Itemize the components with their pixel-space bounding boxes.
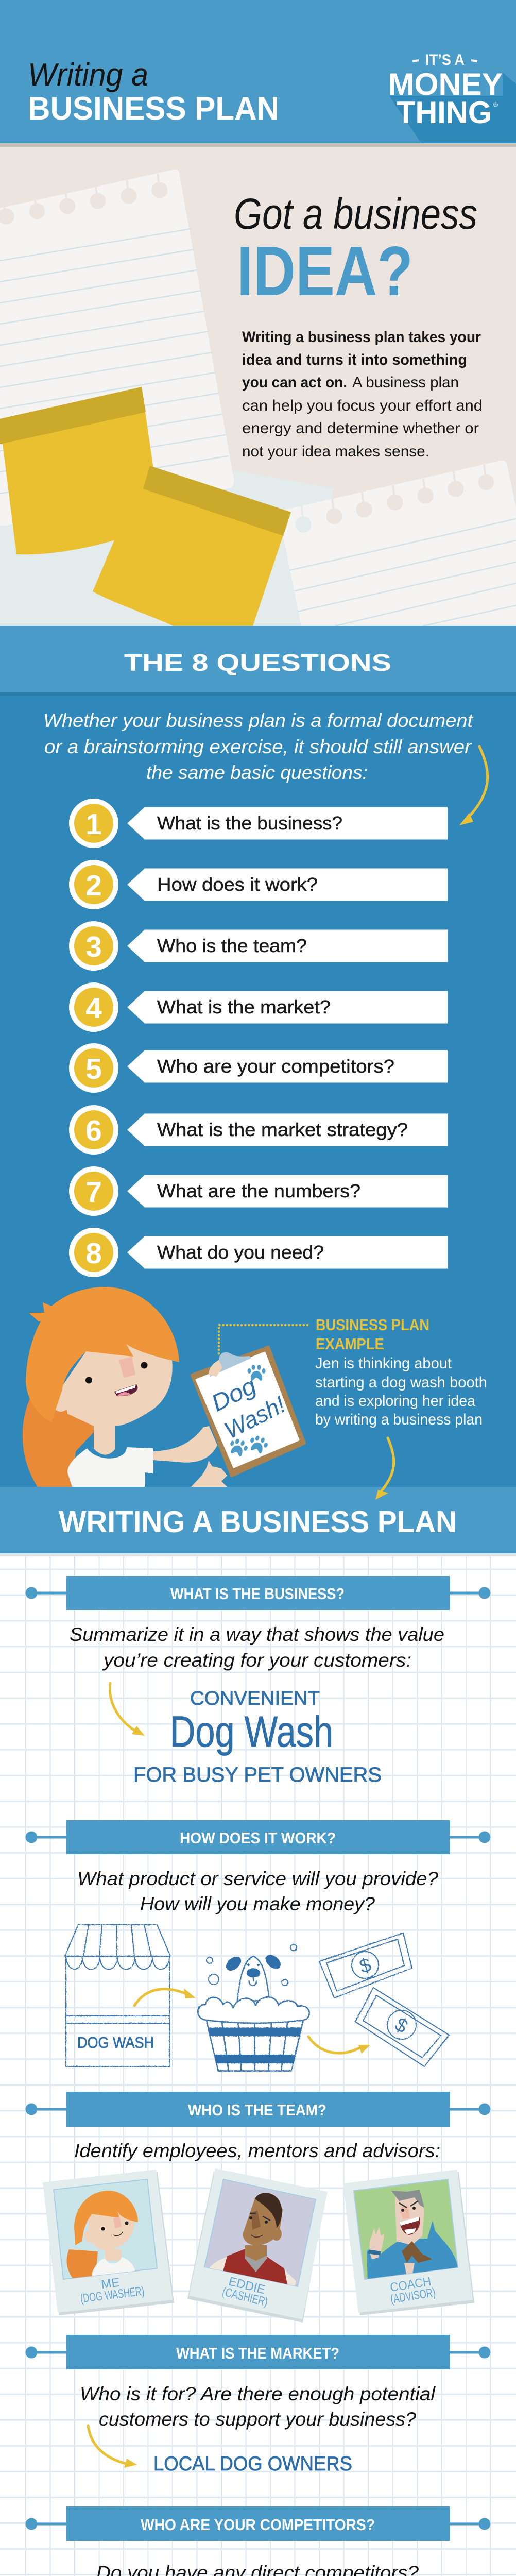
text block: questions intro: or a brainstorming exercise, it should still answer bbox=[44, 736, 472, 757]
question text: Identify employees, mentors and advisors: bbox=[74, 2140, 440, 2161]
panel: writing a business plan band bbox=[0, 1487, 516, 1556]
question 7: 7 bbox=[85, 1176, 102, 1209]
clipboard bbox=[192, 1347, 304, 1476]
panel: the 8 questions bbox=[0, 626, 516, 1487]
handwritten answer: Dog Wash bbox=[170, 1707, 333, 1756]
text block: intro paragraph: A business plan bbox=[352, 374, 459, 391]
question 2: How does it work? bbox=[157, 874, 318, 895]
section header bbox=[26, 1820, 490, 1854]
question 8: What do you need? bbox=[157, 1242, 324, 1263]
text block: intro paragraph: energy and determine whether or bbox=[242, 420, 479, 437]
question text: customers to support your business? bbox=[99, 2409, 416, 2430]
icon: dog in tub bbox=[198, 1944, 309, 2071]
arrow bbox=[88, 2426, 137, 2468]
section header bbox=[26, 2506, 490, 2541]
question text: How will you make money? bbox=[140, 1893, 375, 1914]
panel: got a business idea bbox=[0, 147, 516, 626]
photo card: me: ME bbox=[100, 2276, 121, 2292]
text block: intro paragraph: Writing a business plan takes your bbox=[242, 329, 481, 346]
arrow bbox=[308, 2037, 370, 2054]
logo: it's a money thing: THING bbox=[397, 95, 492, 130]
photo card: me: (DOG WASHER) bbox=[79, 2284, 145, 2306]
logo: it's a money thing: ® bbox=[493, 101, 498, 108]
section header bbox=[26, 2092, 490, 2127]
heading: writing a business plan: WRITING A BUSINESS PLAN bbox=[59, 1505, 457, 1539]
photo card: eddie: EDDIE bbox=[227, 2275, 267, 2297]
section header: WHO ARE YOUR COMPETITORS? bbox=[141, 2516, 375, 2534]
question 2 bbox=[69, 860, 448, 909]
clipboard: Wash! bbox=[220, 1391, 289, 1444]
handwritten answer: CONVENIENT bbox=[190, 1688, 320, 1709]
callout: business plan example: starting a dog wash booth bbox=[315, 1374, 487, 1391]
heading: writing a business plan bbox=[28, 57, 279, 127]
heading: the 8 questions: THE 8 QUESTIONS bbox=[124, 649, 391, 676]
question text bbox=[70, 1624, 444, 1671]
text block: questions intro bbox=[43, 710, 474, 783]
arrow bbox=[110, 1683, 145, 1736]
section header bbox=[26, 2335, 490, 2369]
photo card: me bbox=[43, 2170, 174, 2315]
callout: business plan example: EXAMPLE bbox=[316, 1335, 384, 1353]
question 7: What are the numbers? bbox=[157, 1180, 360, 1201]
section: what is the business bbox=[26, 1576, 490, 1786]
callout: business plan example: Jen is thinking about bbox=[315, 1355, 452, 1372]
question text bbox=[80, 2383, 436, 2430]
question text: you’re creating for your customers: bbox=[102, 1650, 411, 1671]
icon: dollar bills: $ bbox=[391, 2013, 411, 2038]
question 8 bbox=[69, 1228, 448, 1277]
callout: business plan example: BUSINESS PLAN bbox=[316, 1316, 429, 1334]
logo: it's a money thing: IT’S A bbox=[425, 52, 465, 69]
sticky note: right bbox=[93, 466, 291, 626]
icon: dollar bills: $ bbox=[357, 1954, 374, 1978]
question 3: 3 bbox=[85, 930, 102, 963]
question 5 bbox=[69, 1043, 448, 1093]
question text: Who is it for? Are there enough potential bbox=[80, 2383, 436, 2404]
question 4 bbox=[69, 982, 448, 1032]
photo card: eddie bbox=[187, 2168, 328, 2323]
text block: intro paragraph: you can act on. bbox=[242, 374, 347, 391]
question 1: 1 bbox=[85, 808, 102, 841]
question 6: 6 bbox=[85, 1114, 102, 1147]
heading: writing a business plan: BUSINESS PLAN bbox=[28, 91, 279, 127]
handwritten answer: LOCAL DOG OWNERS bbox=[153, 2453, 352, 2475]
text block: intro paragraph: idea and turns it into something bbox=[242, 351, 467, 368]
question 2: 2 bbox=[85, 869, 102, 902]
arrow: to question list bbox=[459, 747, 488, 825]
icon: dog wash shop: DOG WASH bbox=[77, 2033, 154, 2052]
dotted connector bbox=[219, 1325, 307, 1357]
photo card: coach: COACH bbox=[389, 2275, 432, 2295]
question text: Summarize it in a way that shows the value bbox=[70, 1624, 444, 1645]
heading: got a business idea: Got a business bbox=[234, 190, 477, 238]
question 6 bbox=[69, 1105, 448, 1155]
question 6: What is the market strategy? bbox=[157, 1119, 408, 1140]
section header: WHAT IS THE MARKET? bbox=[176, 2344, 339, 2362]
handwritten answer: FOR BUSY PET OWNERS bbox=[133, 1764, 382, 1786]
question 4: 4 bbox=[85, 992, 102, 1025]
callout: business plan example: and is exploring her idea bbox=[315, 1393, 475, 1410]
question 4: What is the market? bbox=[157, 996, 331, 1018]
section: what is the market bbox=[26, 2335, 490, 2475]
panel: top header bbox=[0, 0, 516, 147]
question text: What product or service will you provide? bbox=[77, 1868, 438, 1889]
clipboard: Dog bbox=[207, 1371, 261, 1417]
icon: dollar bills bbox=[319, 1933, 449, 2066]
section: who are your competitors bbox=[26, 2506, 490, 2576]
text block: questions intro: Whether your business plan is a formal document bbox=[43, 710, 474, 731]
section: who is the team bbox=[26, 2092, 490, 2323]
question 8: 8 bbox=[85, 1237, 102, 1270]
illustration: jen with clipboard bbox=[23, 1287, 304, 1487]
text block: questions intro: the same basic questions: bbox=[146, 762, 368, 783]
section header: HOW DOES IT WORK? bbox=[180, 1829, 336, 1847]
logo: it's a money thing bbox=[388, 52, 516, 143]
heading: writing a business plan: Writing a bbox=[28, 57, 148, 93]
arrow bbox=[134, 1988, 196, 2006]
question 5: Who are your competitors? bbox=[157, 1056, 394, 1077]
question 3 bbox=[69, 921, 448, 971]
callout: business plan example: by writing a business plan bbox=[315, 1411, 483, 1428]
heading: got a business idea: IDEA? bbox=[237, 232, 413, 310]
logo: it's a money thing: MONEY bbox=[388, 67, 503, 101]
question 7 bbox=[69, 1166, 448, 1216]
question 1: What is the business? bbox=[157, 812, 342, 834]
heading: got a business idea bbox=[234, 190, 477, 310]
photo card: coach bbox=[343, 2170, 474, 2315]
callout: business plan example bbox=[315, 1316, 487, 1428]
text block: intro paragraph: can help you focus your effort and bbox=[242, 397, 483, 414]
photo card: eddie: (CASHIER) bbox=[221, 2284, 269, 2309]
handwritten answer bbox=[133, 1688, 382, 1786]
notepad: right sheet bbox=[278, 461, 516, 626]
question 1 bbox=[69, 799, 448, 848]
panel: grid paper background bbox=[0, 1556, 516, 2576]
sticky note: left bbox=[0, 387, 160, 554]
section: how does it work bbox=[26, 1820, 490, 2071]
arrow: to writing a business plan bbox=[375, 1438, 394, 1500]
question 5: 5 bbox=[85, 1053, 102, 1086]
icon: dog wash shop bbox=[65, 1925, 170, 2066]
section header: WHO IS THE TEAM? bbox=[188, 2101, 326, 2119]
section header: WHAT IS THE BUSINESS? bbox=[170, 1585, 345, 1603]
photo card: coach: (ADVISOR) bbox=[390, 2285, 437, 2307]
notepad: left sheet bbox=[0, 170, 234, 526]
section header bbox=[26, 1576, 490, 1610]
question 3: Who is the team? bbox=[157, 935, 307, 956]
question text bbox=[77, 1868, 438, 1914]
text block: intro paragraph: not your idea makes sense. bbox=[242, 443, 429, 460]
text block: intro paragraph bbox=[242, 329, 483, 460]
